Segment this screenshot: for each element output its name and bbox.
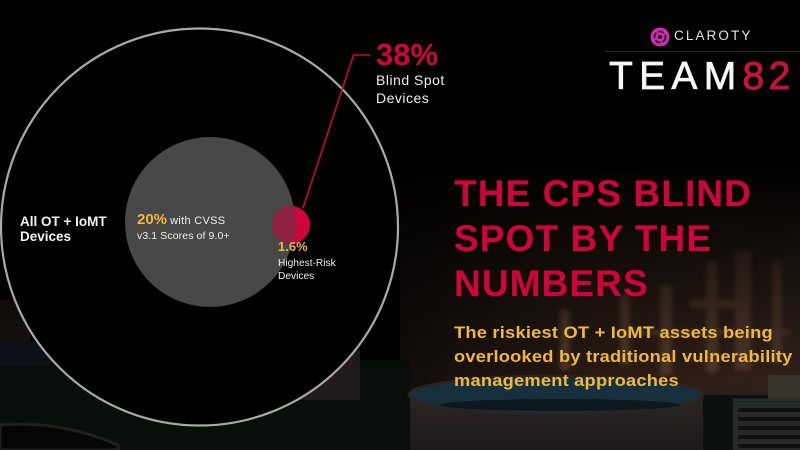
label: 20% CVSS: 20% with CVSS	[137, 211, 225, 228]
circle: CVSS 9.0+ devices	[125, 137, 295, 307]
label: 1.6% highest-risk: 1.6%	[278, 239, 308, 254]
subheading: The riskiest OT + IoMT assets being	[454, 324, 773, 342]
label: 1.6% highest-risk: Devices	[278, 270, 314, 282]
circle: highest-risk devices	[272, 206, 310, 244]
label: all devices	[20, 214, 107, 244]
subheading: management approaches	[454, 372, 679, 390]
subheading: overlooked by traditional vulnerability	[454, 348, 793, 366]
cooling unit grill	[733, 400, 800, 450]
label: 20% CVSS: v3.1 Scores of 9.0+	[137, 230, 230, 242]
leader line to 38% callout	[303, 55, 370, 208]
callout: 38% blind spot	[376, 37, 445, 106]
heading: NUMBERS	[454, 263, 649, 304]
label: 1.6% highest-risk: Highest-Risk	[278, 258, 336, 269]
storage tank	[409, 376, 703, 450]
label: all devices: All OT + IoMT	[20, 214, 107, 229]
heading: SPOT BY THE	[454, 218, 712, 259]
logo: Claroty Team82	[605, 28, 800, 98]
label: 1.6% highest-risk	[278, 239, 336, 282]
wordmark: Claroty: CLAROTY	[674, 28, 752, 43]
callout: 38% blind spot: 38%	[376, 37, 438, 72]
callout: 38% blind spot: Blind Spot	[376, 72, 445, 88]
callout: 38% blind spot: Devices	[376, 90, 429, 106]
label: 20% CVSS	[137, 211, 230, 242]
wordmark: Team82: TEAM82	[609, 55, 795, 98]
subheading	[454, 324, 793, 390]
icon: Claroty logo mark	[650, 28, 670, 46]
label: all devices: Devices	[20, 229, 71, 244]
divider	[605, 51, 800, 52]
circle: all OT + IoMT devices	[1, 28, 398, 426]
heading	[454, 173, 752, 304]
heading: THE CPS BLIND	[454, 173, 752, 214]
